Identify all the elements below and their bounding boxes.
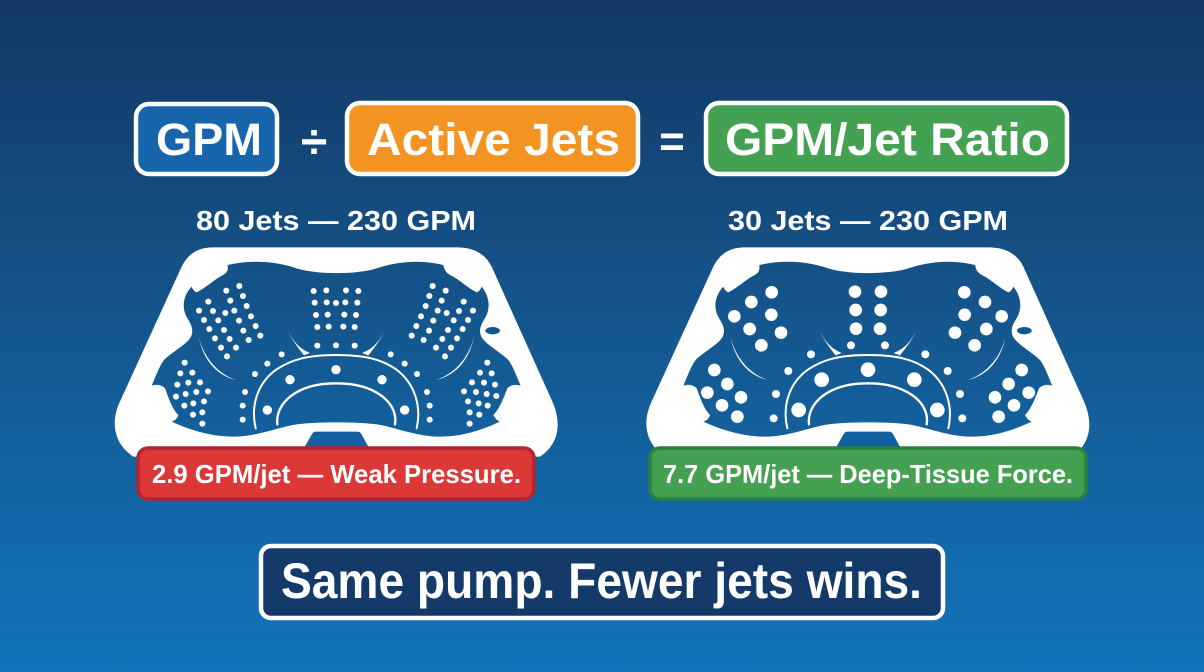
banner: deep-tissue force: 7.7 GPM/jet — Deep-Tissue Force. — [663, 459, 1073, 489]
banner: weak pressure — [138, 448, 534, 499]
jets: 80 small — [173, 283, 499, 427]
divide operator: ÷ — [301, 116, 327, 169]
banner: weak pressure: 2.9 GPM/jet — Weak Pressure. — [152, 459, 521, 489]
formula box: Active Jets: Active Jets — [367, 114, 620, 165]
takeaway: Same pump. Fewer jets wins. — [281, 553, 922, 609]
jets: 30 large — [701, 285, 1035, 423]
spa seat: 80 jets — [115, 247, 558, 457]
banner: deep-tissue force — [650, 448, 1086, 499]
equals operator: = — [659, 117, 685, 166]
formula box: GPM — [136, 104, 277, 174]
formula box: Active Jets — [347, 103, 638, 174]
formula box: GPM/Jet Ratio: GPM/Jet Ratio — [725, 114, 1050, 165]
formula box: GPM: GPM — [156, 114, 262, 165]
spa seat: 30 jets — [646, 247, 1089, 457]
label: 30 jets: 30 Jets — 230 GPM — [728, 205, 1008, 236]
formula box: GPM/Jet Ratio — [706, 103, 1067, 174]
label: 80 jets: 80 Jets — 230 GPM — [196, 205, 476, 236]
formula — [136, 103, 1067, 174]
